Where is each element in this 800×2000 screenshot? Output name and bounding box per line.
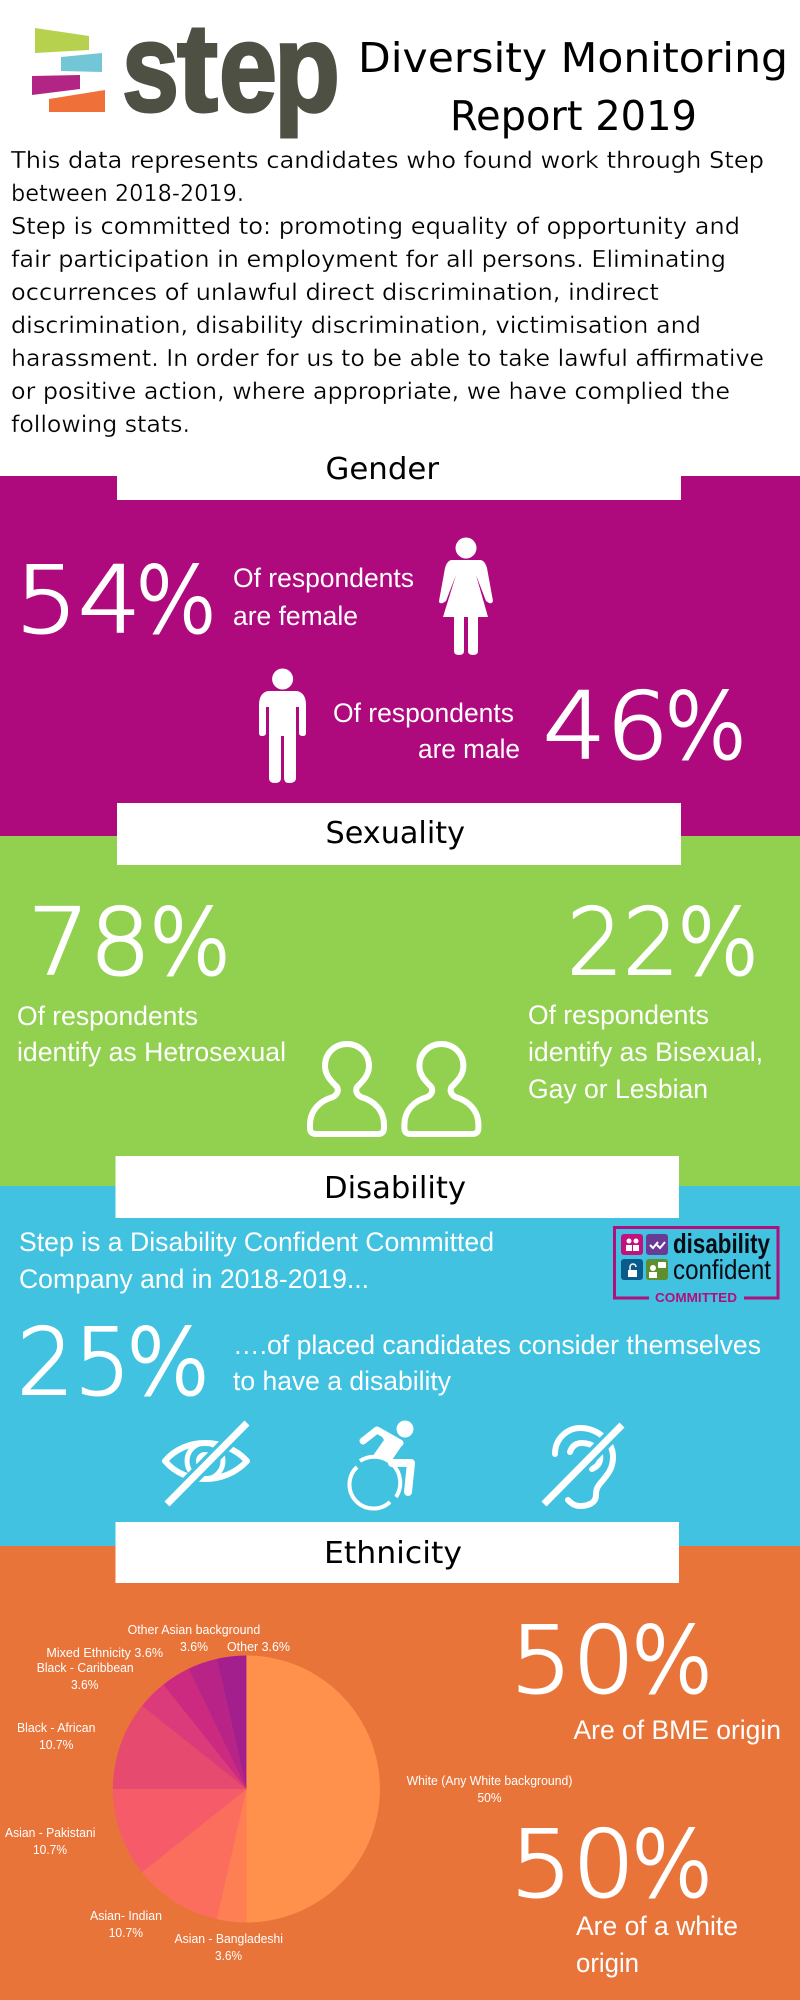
intro text: [10, 148, 764, 438]
text: heterosexual: identify as Hetrosexual: [17, 1037, 286, 1067]
pie labels: Black - African: [17, 1720, 95, 1735]
badge: disability confident committed: confident: [673, 1254, 771, 1285]
intro text: following stats.: [11, 412, 190, 438]
logo: Step: s: [122, 0, 179, 138]
stat: 54% female: 54: [15, 547, 141, 654]
intro text: Step is committed to: promoting equality of opportunity and: [11, 214, 740, 240]
stat: 46% male: [543, 673, 747, 780]
pie labels: Asian- Indian: [90, 1908, 162, 1923]
intro text: occurrences of unlawful direct discrimination, indirect: [11, 280, 659, 306]
text: bisexual, gay or lesbian: identify as Bisexual,: [528, 1037, 763, 1067]
pie labels: 10.7%: [33, 1842, 67, 1857]
text: female respondents: Of respondents: [233, 563, 414, 593]
intro text: fair participation in employment for all persons. Eliminating: [11, 247, 726, 273]
text: placed candidates: [233, 1330, 761, 1396]
logo: Step: p: [274, 0, 340, 138]
title: Diversity Monitoring: [358, 34, 788, 82]
badge: disability confident committed: [614, 1228, 778, 1305]
text: placed candidates: ….of placed candidates consider themselves: [233, 1330, 761, 1360]
stat: 50% white: [510, 1811, 713, 1918]
pie labels: [5, 1622, 572, 1963]
heading: Ethnicity: [116, 1522, 679, 1583]
pie chart: ethnicity: [113, 1656, 380, 1922]
text: white origin: Are of a white: [576, 1911, 738, 1941]
panel: ethnicity: [0, 1546, 800, 2000]
stat: 22%: 22: [567, 889, 679, 996]
text: white origin: [576, 1911, 738, 1978]
stat: 22%: %: [677, 889, 759, 996]
stat: 22%: [567, 889, 759, 996]
text: BME origin: Are of BME origin: [574, 1715, 781, 1745]
title: Report 2019: [450, 92, 697, 140]
pie labels: White (Any White background): [407, 1773, 572, 1788]
text: placed candidates: to have a disability: [233, 1366, 451, 1396]
intro text: between 2018-2019.: [11, 181, 244, 207]
icon: two people outlines: [310, 1044, 478, 1134]
pie labels: Mixed Ethnicity 3.6%: [46, 1645, 163, 1660]
text: male respondents: [333, 698, 520, 764]
panel: disability: [0, 1186, 800, 1546]
text: heterosexual: [17, 1001, 286, 1067]
panel: gender: [0, 476, 800, 836]
badge: disability confident committed: COMMITTED: [655, 1290, 737, 1305]
logo: Step: t: [177, 0, 218, 138]
text: disability confident statement: Company and in 2018-2019...: [19, 1264, 369, 1294]
icon: male figure: [259, 668, 306, 783]
stat: 78%: %: [149, 889, 231, 996]
heading: Sexuality: [117, 803, 681, 865]
heading: Disability: Disability: [324, 1171, 466, 1206]
stat: 46% male: %: [664, 673, 747, 780]
text: female respondents: are female: [233, 601, 358, 631]
stat: 25%: [17, 1309, 210, 1416]
intro text: or positive action, where appropriate, we have complied the: [11, 379, 730, 405]
heading: Disability: [116, 1156, 679, 1218]
pie labels: 3.6%: [180, 1639, 208, 1654]
stat: 54% female: [15, 547, 217, 654]
stat: 50% white: %: [631, 1811, 713, 1918]
intro text: This data represents candidates who found work through Step: [10, 148, 764, 174]
stat: 54% female: %: [135, 547, 217, 654]
text: bisexual, gay or lesbian: Gay or Lesbian: [528, 1074, 708, 1104]
stat: 50% BME: %: [631, 1607, 713, 1714]
heading: Ethnicity: Ethnicity: [324, 1536, 462, 1571]
stat: 78%: 78: [28, 889, 151, 996]
panel: sexuality: [0, 836, 800, 1186]
pie labels: 10.7%: [109, 1925, 143, 1940]
icon: wheelchair: [349, 1420, 414, 1509]
pie labels: 10.7%: [39, 1737, 74, 1752]
badge: disability confident committed: disability: [673, 1228, 770, 1259]
pie labels: Asian - Bangladeshi: [174, 1931, 283, 1946]
logo: Step: [32, 0, 340, 138]
text: white origin: origin: [576, 1948, 639, 1978]
logo: Step: e: [219, 0, 277, 138]
intro text: discrimination, disability discrimination, victimisation and: [11, 313, 701, 339]
stat: 50% BME: [510, 1607, 713, 1714]
text: disability confident statement: [19, 1227, 494, 1294]
pie labels: Black - Caribbean: [37, 1660, 134, 1675]
pie labels: Other 3.6%: [227, 1639, 290, 1654]
stat: 46% male: 46: [543, 673, 669, 780]
heading: Sexuality: Sexuality: [326, 816, 465, 851]
stat: 50% white: 50: [510, 1811, 635, 1918]
stat: 25%: %: [126, 1309, 210, 1416]
intro text: harassment. In order for us to be able to take lawful affirmative: [11, 346, 764, 372]
text: disability confident statement: Step is a Disability Confident Committed: [19, 1227, 494, 1257]
pie labels: Asian - Pakistani: [5, 1825, 95, 1840]
text: male respondents: Of respondents: [333, 698, 514, 728]
pie labels: 3.6%: [215, 1948, 242, 1963]
heading: Gender: [117, 440, 681, 500]
text: bisexual, gay or lesbian: [528, 1000, 763, 1104]
stat: 50% BME: 50: [510, 1607, 635, 1714]
heading: Gender: Gender: [326, 452, 440, 487]
text: male respondents: are male: [418, 734, 520, 764]
stat: 78%: [28, 889, 231, 996]
pie labels: 50%: [478, 1790, 502, 1805]
stat: 25%: 25: [17, 1309, 131, 1416]
text: bisexual, gay or lesbian: Of respondents: [528, 1000, 709, 1030]
icon: crossed-out ear: [544, 1425, 622, 1506]
icon: female figure: [439, 538, 493, 655]
text: female respondents: [233, 563, 414, 631]
pie labels: 3.6%: [71, 1677, 99, 1692]
pie labels: Other Asian background: [128, 1622, 260, 1637]
icon: crossed-out eye: [165, 1423, 247, 1504]
text: heterosexual: Of respondents: [17, 1001, 198, 1031]
title: [358, 34, 788, 140]
